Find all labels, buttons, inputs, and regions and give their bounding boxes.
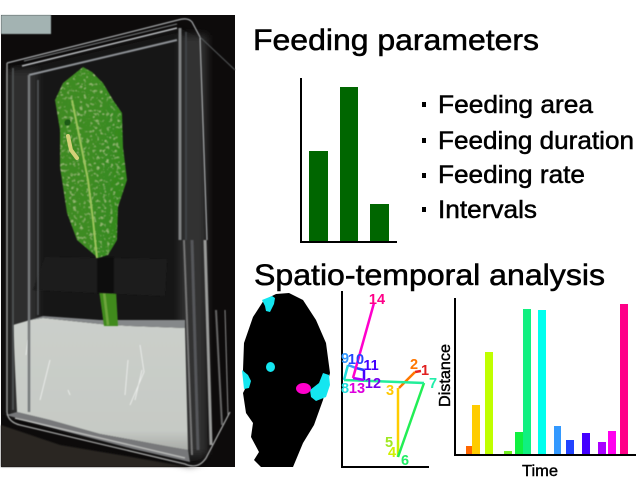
trajectory point labels: 5 xyxy=(385,435,393,451)
chart: distance over time bars xyxy=(437,298,636,480)
photo: black tape xyxy=(33,257,167,296)
photo: leaf xyxy=(55,67,127,258)
trajectory point labels: 13 xyxy=(349,381,365,397)
trajectory point labels: 12 xyxy=(365,376,381,392)
map: leaf feeding map xyxy=(242,293,330,467)
trajectory point labels: 6 xyxy=(401,453,409,469)
chart: movement trajectory xyxy=(341,291,437,469)
list: feeding parameters: Feeding duration xyxy=(438,127,634,155)
photo: caterpillar xyxy=(68,136,77,158)
photo: leaf in a clear plastic box xyxy=(1,15,235,467)
axis label: Time: Time xyxy=(522,463,558,480)
axis label: Distance: Distance xyxy=(437,344,454,407)
heading: Spatio-temporal analysis: Spatio-temporal analysis xyxy=(254,259,605,292)
list: feeding parameters: Feeding rate xyxy=(438,161,585,189)
trajectory point labels: 8 xyxy=(341,381,349,397)
photo: stem xyxy=(99,290,118,326)
trajectory point labels: 10 xyxy=(348,352,364,368)
trajectory point labels: 11 xyxy=(363,358,379,374)
trajectory point labels: 14 xyxy=(369,292,385,308)
chart: green bar chart xyxy=(301,78,397,242)
trajectory point labels: 4 xyxy=(388,445,396,461)
photo: gel block xyxy=(6,316,190,462)
list: feeding parameters: Feeding area xyxy=(438,91,593,119)
list: feeding parameters xyxy=(422,91,634,224)
trajectory point labels: 9 xyxy=(341,351,349,367)
title: Feeding parameters: Feeding parameters xyxy=(253,24,539,57)
trajectory point labels: 1 xyxy=(421,363,429,379)
trajectory point labels: 2 xyxy=(410,357,418,373)
trajectory point labels xyxy=(341,292,437,469)
list: feeding parameters: Intervals xyxy=(438,196,537,224)
trajectory point labels: 3 xyxy=(386,383,394,399)
trajectory point labels: 7 xyxy=(429,376,437,392)
photo: box edges xyxy=(7,19,235,466)
